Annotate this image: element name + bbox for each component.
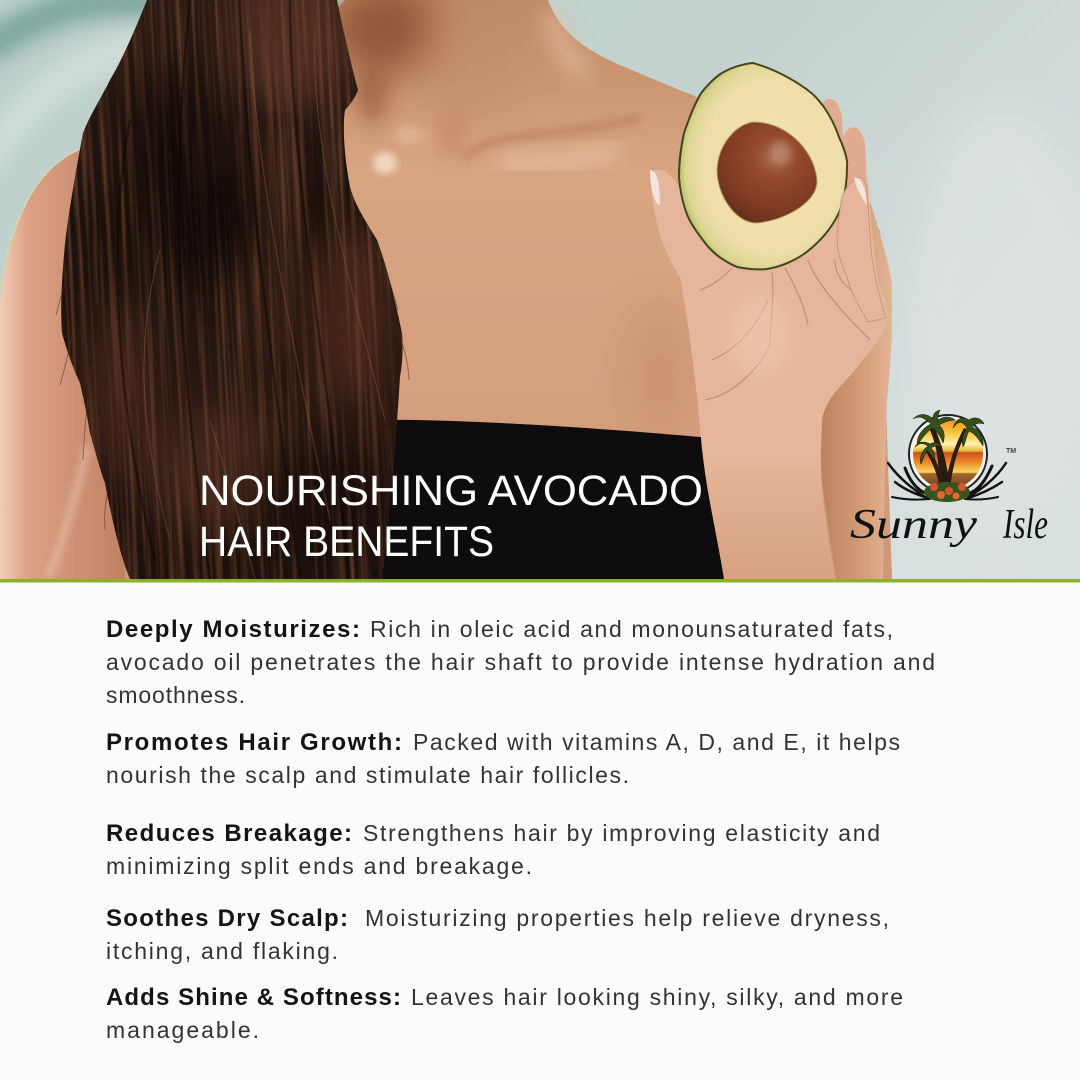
avocado pit	[717, 122, 817, 223]
benefit: promotes hair growth: nourish the scalp and stimulate hair follicles.	[106, 762, 629, 788]
benefit: reduces breakage: Reduces Breakage:	[106, 820, 352, 847]
palm trees	[913, 410, 984, 490]
thumbnail	[650, 170, 660, 205]
icon: hand holding avocado	[650, 99, 888, 450]
title: NOURISHING AVOCADO	[199, 467, 703, 515]
logo badge: TM	[1006, 448, 1016, 455]
logo wordmark: Isle	[1002, 502, 1048, 548]
right upper arm	[818, 193, 892, 579]
benefit: deeply moisturizes: avocado oil penetrates the hair shaft to provide intense hydration and	[106, 649, 935, 675]
benefit: deeply moisturizes	[106, 616, 935, 708]
photo backdrop	[0, 0, 1080, 579]
benefit: reduces breakage	[106, 820, 880, 879]
benefit: soothes dry scalp: Moisturizing properties help relieve dryness,	[365, 905, 889, 931]
left arm	[0, 135, 130, 579]
benefit: adds shine and softness: Adds Shine & Softness:	[106, 984, 401, 1011]
benefit: reduces breakage: minimizing split ends and breakage.	[106, 853, 532, 879]
thumb over avocado	[837, 177, 886, 322]
title: HAIR BENEFITS	[199, 518, 494, 566]
hair wisps	[56, 240, 409, 530]
divider line	[0, 579, 1080, 582]
neck and collarbone shading	[330, 0, 695, 440]
torso and neck	[125, 0, 892, 579]
logo wordmark: Sunny	[850, 502, 977, 548]
title	[202, 475, 701, 556]
benefit: soothes dry scalp	[106, 905, 889, 964]
palm creases	[700, 260, 870, 400]
logo badge	[888, 410, 1016, 502]
hair	[56, 0, 410, 579]
benefit: promotes hair growth	[106, 729, 900, 788]
benefit: adds shine and softness	[106, 984, 903, 1043]
benefit: soothes dry scalp: itching, and flaking.	[106, 938, 338, 964]
flowers	[924, 482, 970, 502]
chest line at lower left	[48, 445, 88, 578]
benefit: adds shine and softness: manageable.	[106, 1017, 259, 1043]
benefit: promotes hair growth: Promotes Hair Growth:	[106, 729, 402, 756]
benefit: soothes dry scalp: Soothes Dry Scalp:	[106, 905, 348, 932]
benefit: deeply moisturizes: Rich in oleic acid and monounsaturated fats,	[370, 616, 893, 642]
panel: text background	[0, 579, 1080, 1080]
black top	[362, 420, 724, 579]
palm	[651, 170, 888, 450]
benefit: adds shine and softness: Leaves hair looking shiny, silky, and more	[411, 984, 903, 1010]
icon: avocado half	[678, 62, 848, 270]
benefit: promotes hair growth: Packed with vitamins A, D, and E, it helps	[413, 729, 900, 755]
benefit: deeply moisturizes: Deeply Moisturizes:	[106, 616, 360, 643]
back fingers	[823, 98, 867, 188]
panel: hero photo	[0, 0, 1080, 609]
benefit: reduces breakage: Strengthens hair by improving elasticity and	[363, 820, 880, 846]
benefit: deeply moisturizes: smoothness.	[106, 682, 245, 708]
forearm	[702, 448, 836, 579]
logo: Sunny Isle	[850, 410, 1048, 548]
